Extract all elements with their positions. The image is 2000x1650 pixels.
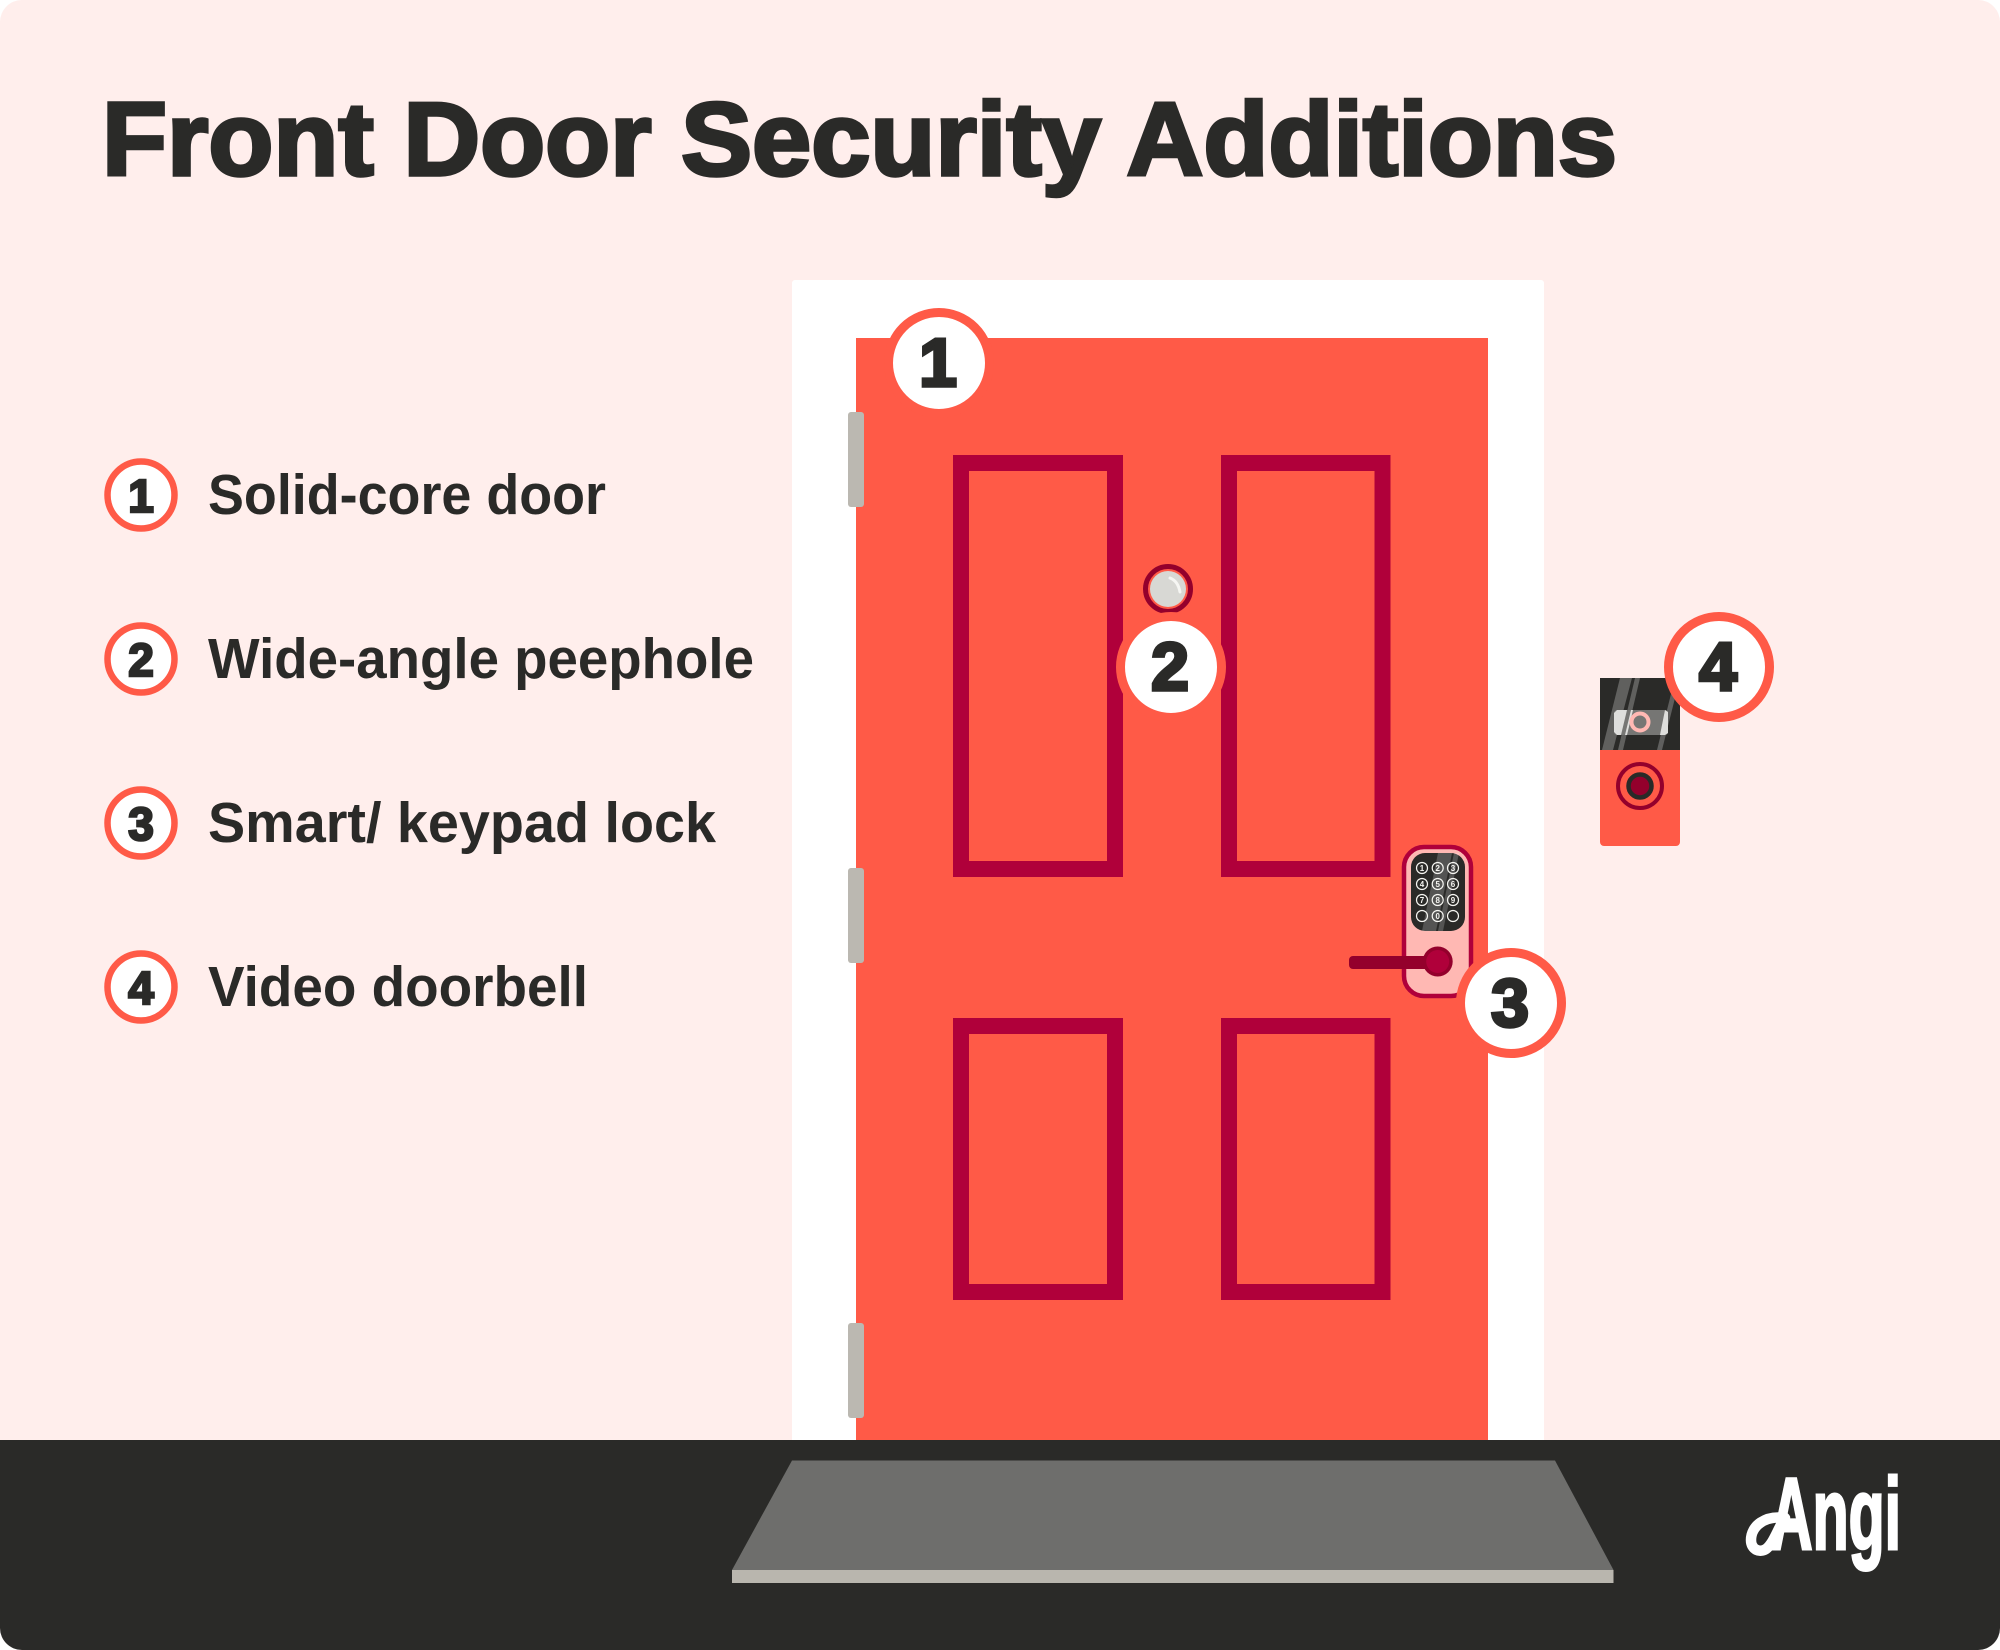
icon: smart keypad lock: 6 <box>1451 880 1456 889</box>
door handle <box>1349 956 1425 969</box>
door panel top left <box>961 463 1115 869</box>
icon: smart keypad lock: 8 <box>1435 896 1440 905</box>
keypad <box>1411 853 1465 931</box>
legend list <box>108 462 754 1020</box>
icon: smart keypad lock: 0 <box>1435 912 1440 921</box>
ground <box>0 1440 2000 1650</box>
hinges <box>848 412 864 1418</box>
title: Front Door Security Additions <box>102 82 1617 198</box>
camera lens <box>1632 714 1648 730</box>
icon: smart keypad lock: 3 <box>1451 864 1456 873</box>
doorbell button <box>1618 764 1662 808</box>
legend item 2: 2 <box>128 634 154 686</box>
number badge 2 <box>1120 616 1222 718</box>
legend item 2: Wide-angle peephole <box>208 627 754 691</box>
icon: video doorbell <box>1600 678 1680 846</box>
legend item 1: Solid-core door <box>208 463 606 527</box>
door panel bottom left <box>961 1026 1115 1292</box>
keypad buttons <box>1416 862 1458 922</box>
number badge 3 <box>1460 952 1562 1054</box>
number badge 4 <box>1668 616 1770 718</box>
icon: smart keypad lock: 7 <box>1420 896 1425 905</box>
logo: Angi <box>1746 1474 1898 1572</box>
doormat <box>732 1460 1614 1583</box>
camera bar <box>1614 710 1668 735</box>
icon: smart keypad lock <box>1349 847 1471 996</box>
logo: Angi: Angi <box>1770 1457 1901 1571</box>
legend item 3: Smart/ keypad lock <box>208 791 716 855</box>
icon: peephole <box>1146 566 1190 612</box>
legend item 4: 4 <box>128 962 154 1014</box>
door <box>856 338 1488 1448</box>
number badge 4: 4 <box>1699 629 1737 705</box>
door panel top right <box>1229 463 1382 869</box>
door frame <box>792 280 1544 1450</box>
lock plate <box>1404 847 1471 996</box>
door panel bottom right <box>1229 1026 1382 1292</box>
icon: smart keypad lock: 4 <box>1420 880 1425 889</box>
legend item 3: 3 <box>128 798 154 850</box>
number badge 1: 1 <box>919 325 957 401</box>
icon: smart keypad lock: 2 <box>1435 864 1440 873</box>
number badge 3: 3 <box>1491 965 1529 1041</box>
legend item 1: 1 <box>128 470 154 522</box>
icon: smart keypad lock: 1 <box>1420 864 1425 873</box>
glare stripes <box>1602 678 1680 750</box>
number badge 2: 2 <box>1151 629 1189 705</box>
icon: smart keypad lock: 5 <box>1435 880 1440 889</box>
icon: smart keypad lock: 9 <box>1451 896 1456 905</box>
legend item 4: Video doorbell <box>208 955 588 1019</box>
number badge 1 <box>888 312 990 414</box>
